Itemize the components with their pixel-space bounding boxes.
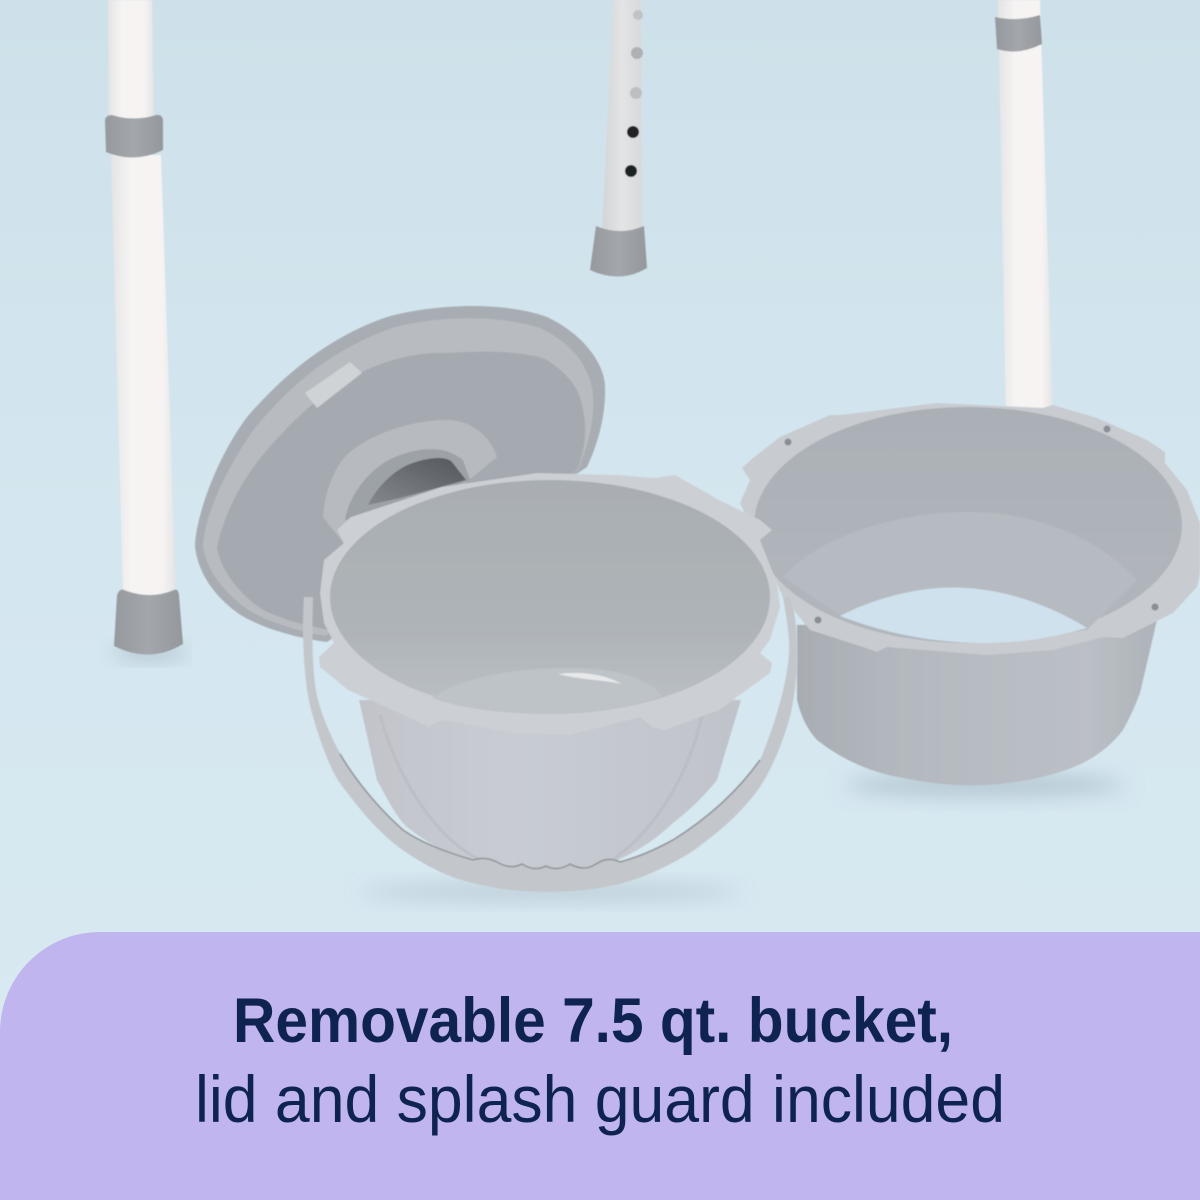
heading: Removable 7.5 qt. bucket, — [233, 986, 953, 1056]
handle — [303, 597, 797, 892]
splash guard — [740, 403, 1200, 797]
lid highlight — [305, 362, 362, 408]
bucket with handle — [303, 473, 797, 901]
subheading: lid and splash guard included — [195, 1062, 1005, 1136]
left chair leg — [105, 0, 188, 659]
lid — [195, 306, 605, 642]
bucket rim — [319, 473, 780, 735]
bucket floor — [432, 668, 662, 714]
guard outer body — [797, 620, 1157, 785]
lid collar — [323, 420, 497, 545]
middle chair leg — [590, 0, 647, 277]
guard rim — [740, 403, 1200, 655]
guard inner wall — [754, 407, 1182, 643]
bucket interior — [330, 480, 770, 714]
guard opening — [840, 587, 1087, 643]
caption panel — [0, 932, 1200, 1200]
handle grip ridges — [340, 754, 760, 869]
right chair leg — [995, 0, 1053, 420]
mounting holes — [784, 426, 1158, 624]
bucket floor highlight — [558, 673, 622, 684]
lid centre hole — [368, 458, 466, 505]
bucket body — [359, 700, 741, 872]
adjustment holes — [625, 10, 643, 177]
